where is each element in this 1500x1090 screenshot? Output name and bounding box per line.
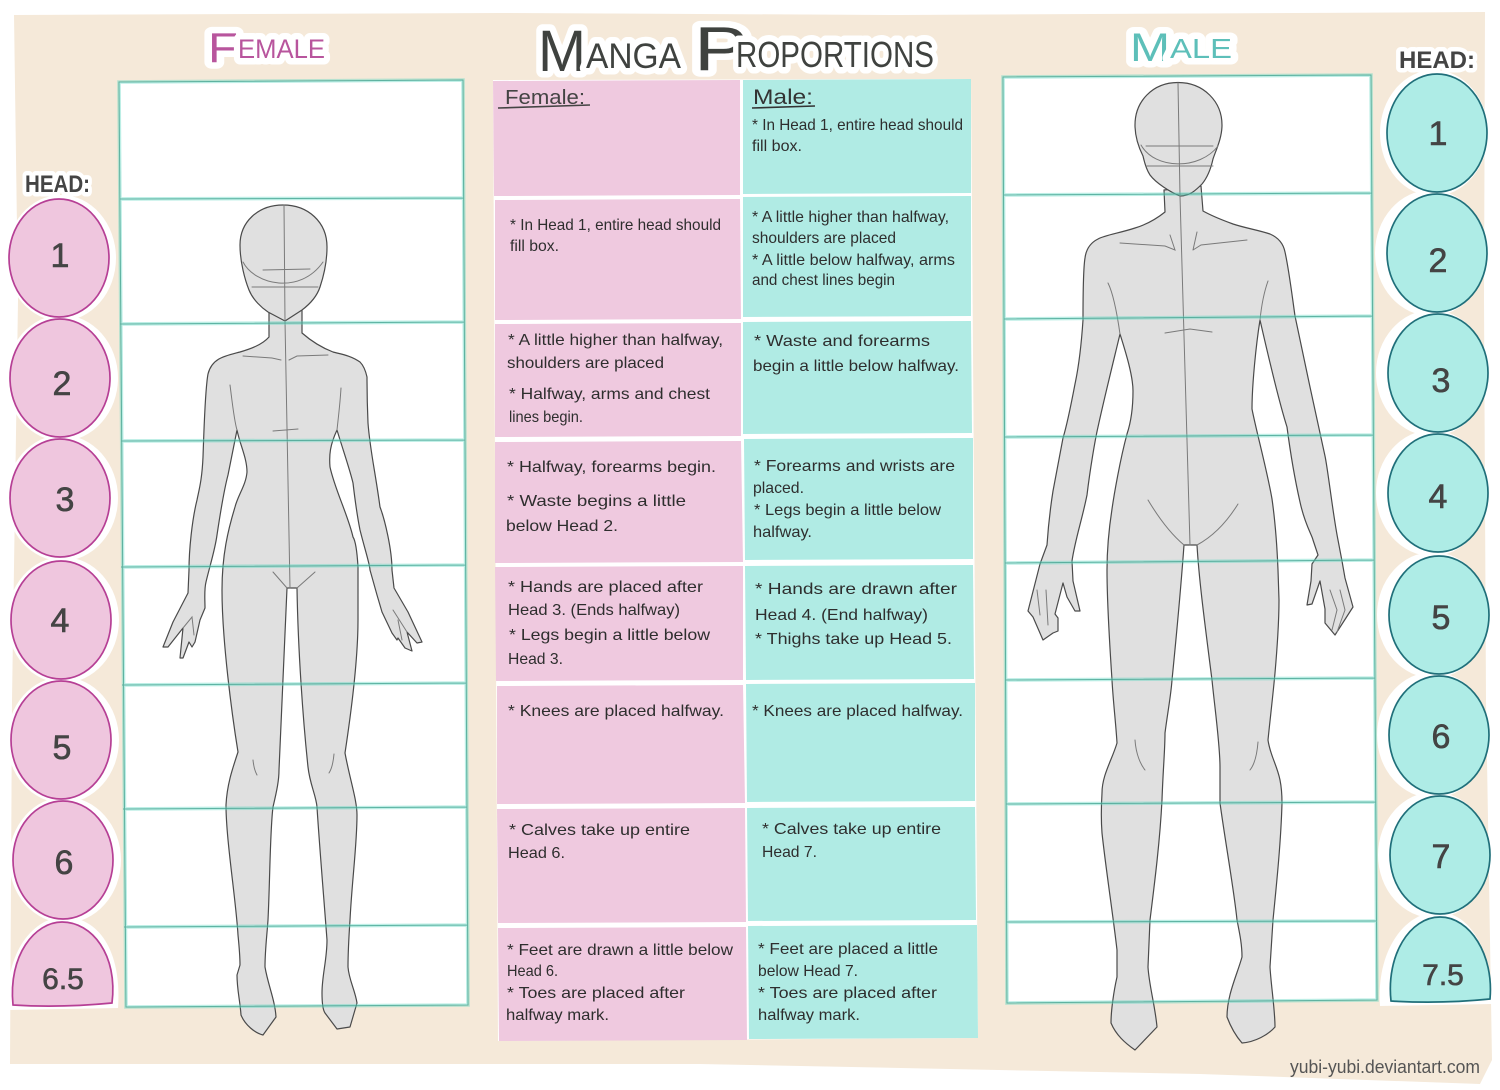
- male notes text: * Hands are drawn after: [755, 581, 958, 598]
- female notes text: * Feet are drawn a little below: [507, 942, 733, 959]
- male notes text: * In Head 1, entire head should: [752, 117, 963, 134]
- female notes text: * Legs begin a little below: [509, 627, 710, 644]
- title: Manga Proportions: M: [538, 19, 586, 84]
- female head numbers: 2: [53, 365, 71, 403]
- watermark credit: yubi-yubi.deviantart.com: [1290, 1057, 1480, 1077]
- male notes text: and chest lines begin: [752, 272, 895, 289]
- female notes text: * Hands are placed after: [508, 579, 704, 596]
- title: Manga Proportions: P: [694, 15, 748, 84]
- heading: Male: ALE: [1170, 33, 1232, 64]
- male notes text: * Thighs take up Head 5.: [755, 631, 952, 648]
- female head numbers: 3: [56, 481, 74, 519]
- male notes text: fill box.: [752, 138, 802, 155]
- female notes text: * Waste begins a little: [507, 493, 686, 510]
- female notes text: [506, 217, 733, 1024]
- male notes text: Head 7.: [762, 844, 817, 861]
- male notes text: * A little higher than halfway,: [752, 209, 949, 226]
- male notes text: * Legs begin a little below: [754, 502, 941, 519]
- male notes text: Head 4. (End halfway): [755, 607, 928, 624]
- male head numbers: 7: [1432, 838, 1450, 876]
- heading: Female column: Female:: [505, 87, 585, 109]
- male head numbers: [1422, 115, 1464, 992]
- panel: proportion notes table: [493, 79, 978, 1041]
- female notes text: Head 6.: [507, 963, 558, 980]
- female notes text: * In Head 1, entire head should: [510, 217, 721, 234]
- male notes text: halfway.: [753, 524, 812, 541]
- female notes text: * Halfway, forearms begin.: [507, 459, 716, 476]
- male grid lines: [1003, 75, 1377, 1003]
- male notes text: * Knees are placed halfway.: [752, 703, 963, 720]
- heading: Male: [1130, 26, 1232, 70]
- female figure: [163, 205, 422, 1035]
- male notes text: shoulders are placed: [752, 230, 896, 247]
- female notes text: Head 6.: [508, 845, 565, 862]
- female head numbers: 6: [55, 844, 73, 882]
- female head circles: [6, 195, 121, 1010]
- label: female head column heading: HEAD:: [25, 171, 90, 198]
- male notes text: [752, 117, 963, 1024]
- male figure: [1028, 82, 1353, 1050]
- female grid lines: [119, 80, 468, 1007]
- female head numbers: 1: [51, 237, 69, 275]
- male notes text: halfway mark.: [758, 1007, 860, 1024]
- title: Manga Proportions: ANGA: [586, 37, 682, 76]
- male head numbers: 6: [1432, 718, 1450, 756]
- male head numbers: 1: [1429, 115, 1447, 153]
- panel: male proportion grid: [1003, 75, 1377, 1050]
- male notes text: begin a little below halfway.: [753, 358, 959, 375]
- female notes text: * Knees are placed halfway.: [508, 703, 724, 720]
- female notes text: Head 3. (Ends halfway): [508, 602, 680, 619]
- heading: Female: EMALE: [238, 34, 325, 64]
- male notes text: * Forearms and wrists are: [754, 458, 955, 475]
- female notes text: * A little higher than halfway,: [508, 332, 723, 349]
- male notes text: * Feet are placed a little: [758, 941, 938, 958]
- female head numbers: 4: [51, 602, 69, 640]
- male notes text: * Waste and forearms: [754, 333, 930, 350]
- female notes text: * Calves take up entire: [509, 822, 690, 839]
- heading: Female: [208, 24, 325, 71]
- male notes text: placed.: [753, 480, 804, 497]
- male head numbers: 2: [1429, 242, 1447, 280]
- female head numbers: [42, 237, 84, 996]
- female head numbers: 5: [53, 729, 71, 767]
- female notes text: shoulders are placed: [507, 355, 664, 372]
- male notes text: * A little below halfway, arms: [752, 252, 955, 269]
- male head circles: [1375, 70, 1492, 1006]
- label: male head column heading: HEAD:: [1399, 47, 1475, 74]
- female notes text: * Halfway, arms and chest: [509, 386, 711, 403]
- male notes column: [743, 79, 978, 1039]
- female notes text: halfway mark.: [506, 1007, 609, 1024]
- title: Manga Proportions: ROPORTIONS: [736, 34, 934, 75]
- panel: female proportion grid: [119, 80, 468, 1035]
- male notes text: * Toes are placed after: [758, 985, 938, 1002]
- male head numbers: 7.5: [1422, 959, 1464, 992]
- female head numbers: 6.5: [42, 963, 84, 996]
- heading: Male: M: [1130, 26, 1170, 70]
- male head numbers: 4: [1429, 478, 1447, 516]
- female notes text: lines begin.: [509, 409, 583, 426]
- male notes text: below Head 7.: [758, 963, 858, 980]
- male head numbers: 3: [1432, 362, 1450, 400]
- heading: Female: F: [208, 24, 238, 71]
- female notes column: [493, 80, 747, 1041]
- male notes text: * Calves take up entire: [762, 821, 941, 838]
- heading: Male column: Male:: [753, 86, 813, 109]
- female notes text: * Toes are placed after: [507, 985, 686, 1002]
- title: Manga Proportions: [538, 15, 934, 84]
- female notes text: below Head 2.: [506, 518, 618, 535]
- female notes text: fill box.: [510, 238, 559, 255]
- female notes text: Head 3.: [508, 651, 563, 668]
- male head numbers: 5: [1432, 599, 1450, 637]
